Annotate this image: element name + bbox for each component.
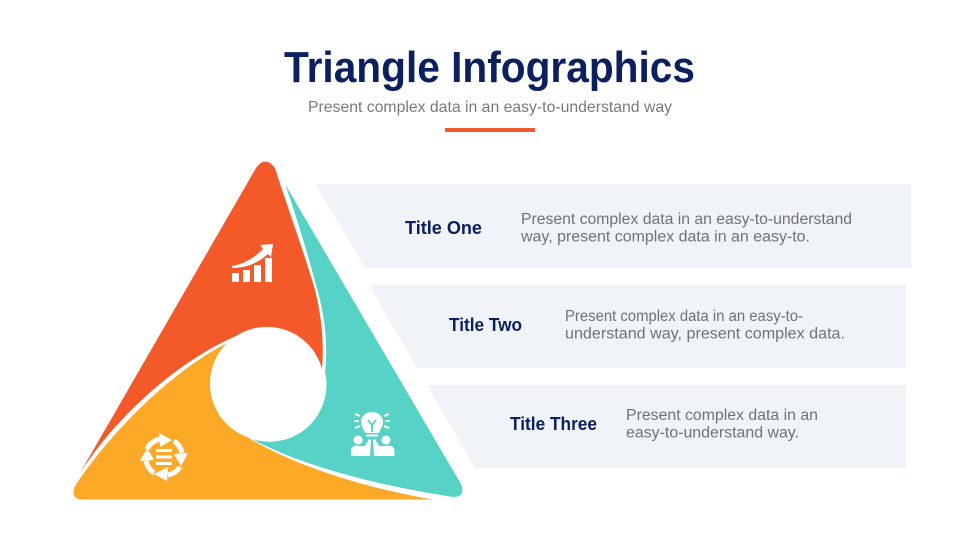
- panel: title two: [369, 285, 906, 368]
- icon: growth chart: [232, 244, 273, 282]
- icon: team with light bulb: [351, 412, 394, 456]
- text block: title three: Present complex data in an: [626, 407, 818, 424]
- icon: cycle arrows with list: [140, 433, 188, 481]
- segment: teal: [252, 184, 462, 497]
- text block: title one: way, present complex data in an easy-to.: [520, 228, 810, 246]
- heading: title three: Title Three: [510, 413, 597, 434]
- accent underline: [445, 128, 535, 132]
- text block: title one: Present complex data in an easy-to-understand: [521, 211, 852, 228]
- subtitle: Present complex data in an easy-to-understand way: [308, 99, 672, 116]
- text block: title three: easy-to-understand way.: [626, 424, 799, 442]
- panel: title one: [315, 184, 911, 268]
- heading: title two: Title Two: [449, 314, 522, 335]
- text block: title two: understand way, present complex data.: [565, 326, 845, 342]
- text block: title two: Present complex data in an easy-to-: [565, 308, 803, 325]
- heading: title one: Title One: [405, 217, 482, 238]
- panel: title three: [427, 385, 906, 468]
- triangle diagram: [74, 162, 462, 500]
- segment: orange: [80, 162, 323, 473]
- segment: yellow: [74, 343, 433, 500]
- title: Triangle Infographics: [284, 43, 695, 92]
